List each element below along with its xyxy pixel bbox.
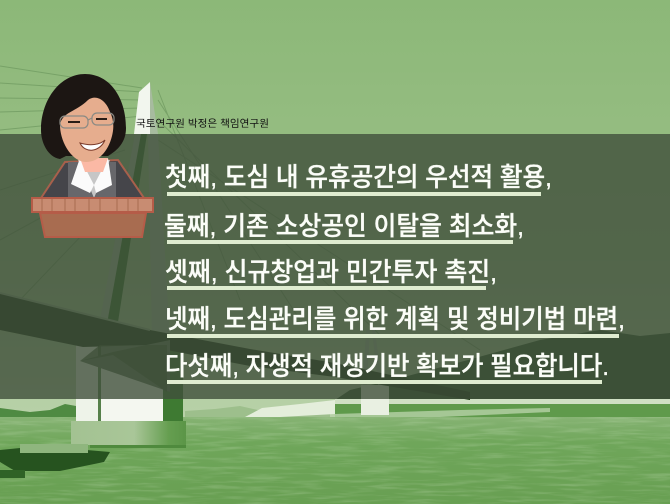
- boat: [0, 446, 110, 471]
- presenter character at podium: [32, 74, 153, 237]
- bridge cables: [0, 66, 480, 350]
- podium body: [40, 213, 146, 237]
- green shoreline: [335, 404, 670, 418]
- face: [60, 98, 113, 162]
- researcher caption: 국토연구원 박정은 책임연구원: [136, 117, 269, 130]
- water: [0, 417, 670, 504]
- line 3: 셋째, 신규창업과 민간투자 촉진,: [165, 257, 497, 287]
- eyes: [68, 119, 107, 122]
- torso: [41, 160, 144, 198]
- far shore left hills: [0, 404, 76, 418]
- podium stripes: [42, 199, 138, 211]
- line 1: 첫째, 도심 내 유휴공간의 우선적 활용,: [165, 162, 552, 192]
- smile: [80, 140, 105, 150]
- pier cap: [80, 340, 170, 392]
- hair: [41, 74, 126, 159]
- bridge deck: [0, 293, 470, 400]
- bridge pier footing: [71, 421, 186, 445]
- distant pier: [361, 385, 389, 415]
- glasses: [60, 113, 114, 128]
- line 5: 다섯째, 자생적 재생기반 확보가 필요합니다.: [165, 351, 609, 381]
- line 2: 둘째, 기존 소상공인 이탈을 최소화,: [164, 211, 524, 241]
- neck: [80, 158, 108, 172]
- bridge pier legs: [76, 345, 101, 421]
- town along shore: [245, 400, 335, 418]
- hill right: [335, 330, 670, 412]
- podium top: [32, 198, 153, 212]
- pylon: [98, 82, 170, 340]
- line 4: 넷째, 도심관리를 위한 계획 및 정비기법 마련,: [165, 304, 625, 334]
- main text lines: [164, 162, 625, 384]
- dark translucent panel: [0, 134, 670, 399]
